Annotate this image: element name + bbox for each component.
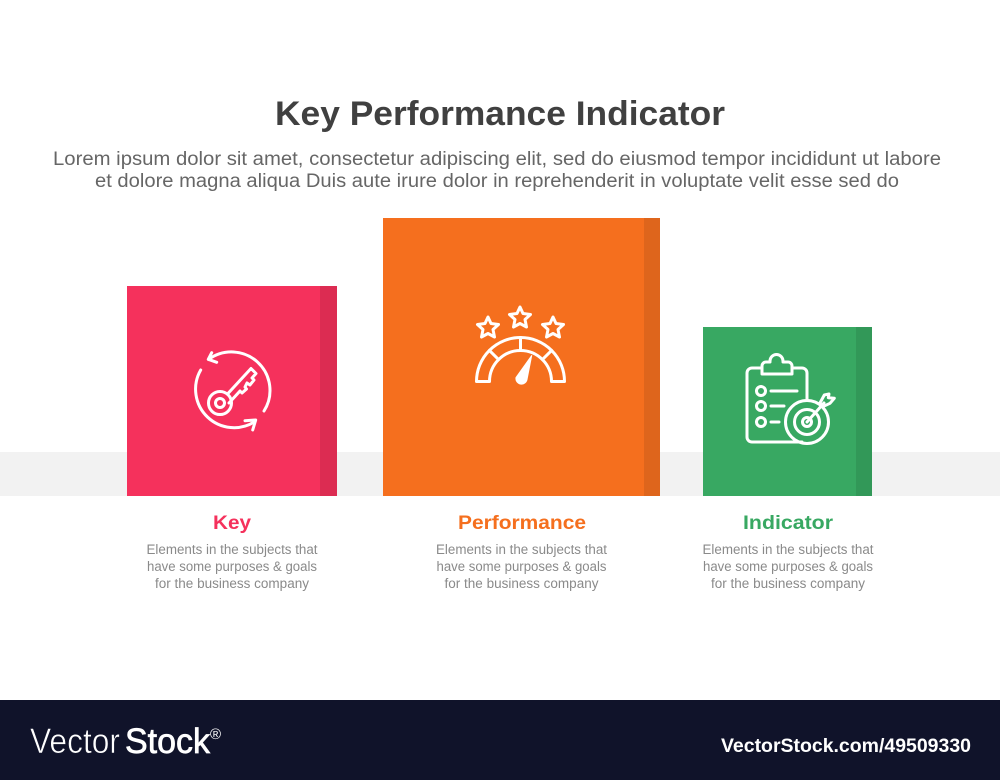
footer logo: ® [210,726,221,743]
description: key [146,542,318,591]
panel: performance bar [383,218,660,496]
description: key: Elements in the subjects that [146,542,318,557]
footer logo: Stock [125,722,210,761]
description: performance: Elements in the subjects that [436,542,607,557]
icon: key with rotating arrows [196,352,270,430]
label: indicator [702,513,874,591]
description: performance [436,542,607,591]
label: key: Key [213,513,251,534]
background band [0,452,1000,496]
footer logo [30,722,221,761]
description: performance: have some purposes & goals [436,559,607,574]
description: indicator: have some purposes & goals [703,559,873,574]
panel: indicator bar [703,327,872,496]
description: performance: for the business company [444,576,599,591]
label: indicator: Indicator [743,513,834,534]
description: indicator [702,542,874,591]
label: performance [436,513,607,591]
footer bar [0,700,1000,780]
label: key [146,513,318,591]
icon: clipboard with target [747,354,834,444]
panel: key bar [127,286,337,496]
description: indicator: Elements in the subjects that [702,542,874,557]
footer logo: Vector [30,722,120,761]
description: key: for the business company [155,576,309,591]
intro text: Lorem ipsum dolor sit amet, consectetur adipiscing elit, sed do eiusmod tempor incididunt ut labore [53,149,941,170]
footer url: VectorStock.com/49509330 [721,736,971,757]
label: performance: Performance [458,513,586,534]
description: key: have some purposes & goals [147,559,317,574]
title: Key Performance Indicator [275,95,725,133]
icon: gauge with three stars [476,307,564,384]
intro text: et dolore magna aliqua Duis aute irure dolor in reprehenderit in voluptate velit esse sed do [95,171,899,192]
description: indicator: for the business company [711,576,865,591]
intro text [53,149,941,192]
